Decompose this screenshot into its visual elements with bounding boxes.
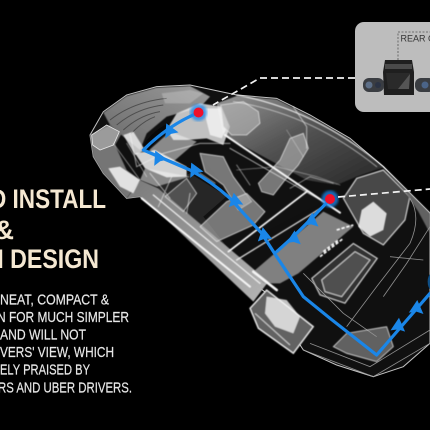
main route [143,113,430,355]
body text: RS AND UBER DRIVERS. [0,380,132,396]
cabin lower rear dark floor [157,173,257,272]
body text: VERS' VIEW, WHICH [0,344,114,361]
route direction arrows [149,120,425,332]
marker: rear camera point [190,104,207,121]
body text: NEAT, COMPACT & [0,292,109,308]
car x-ray illustration [90,85,430,377]
rear bumper quarter [90,125,140,198]
panel background [355,22,430,112]
floor bars and body lines [113,95,430,290]
engine block [312,225,377,303]
front wheel housing [250,290,313,353]
rear glass stripes [110,98,167,135]
taillight [92,125,119,150]
front suspension cluster [358,202,387,237]
car body silhouette [90,85,430,377]
body text [0,292,132,396]
dark slit along wire [143,123,172,149]
body text: N FOR MUCH SIMPLER [0,309,129,326]
body text: ELY PRAISED BY [0,362,90,378]
floor cells [203,146,325,251]
icon: dash cam [363,60,430,95]
heading [0,184,106,274]
front edge glow [428,274,430,289]
rear glass [103,86,210,150]
front wheel arch [343,170,410,245]
bright rear clutter [108,90,230,193]
front door band [253,212,353,283]
marker: front camera point [322,190,338,208]
body text: AND WILL NOT [0,326,86,344]
rear deck grey filler [140,168,190,187]
wiring route in blue [143,113,430,355]
inset panel: rear camera product [355,22,430,112]
seats [165,102,308,242]
front bumper [333,327,393,362]
grey panel below slit [149,132,197,162]
dashed callout [398,32,430,60]
branch route [277,199,330,252]
sill band [127,180,268,302]
dashed leader lines [213,78,430,197]
engine bay lines [303,198,430,377]
hood edge band [383,167,430,233]
cabin roof glass [217,96,383,185]
